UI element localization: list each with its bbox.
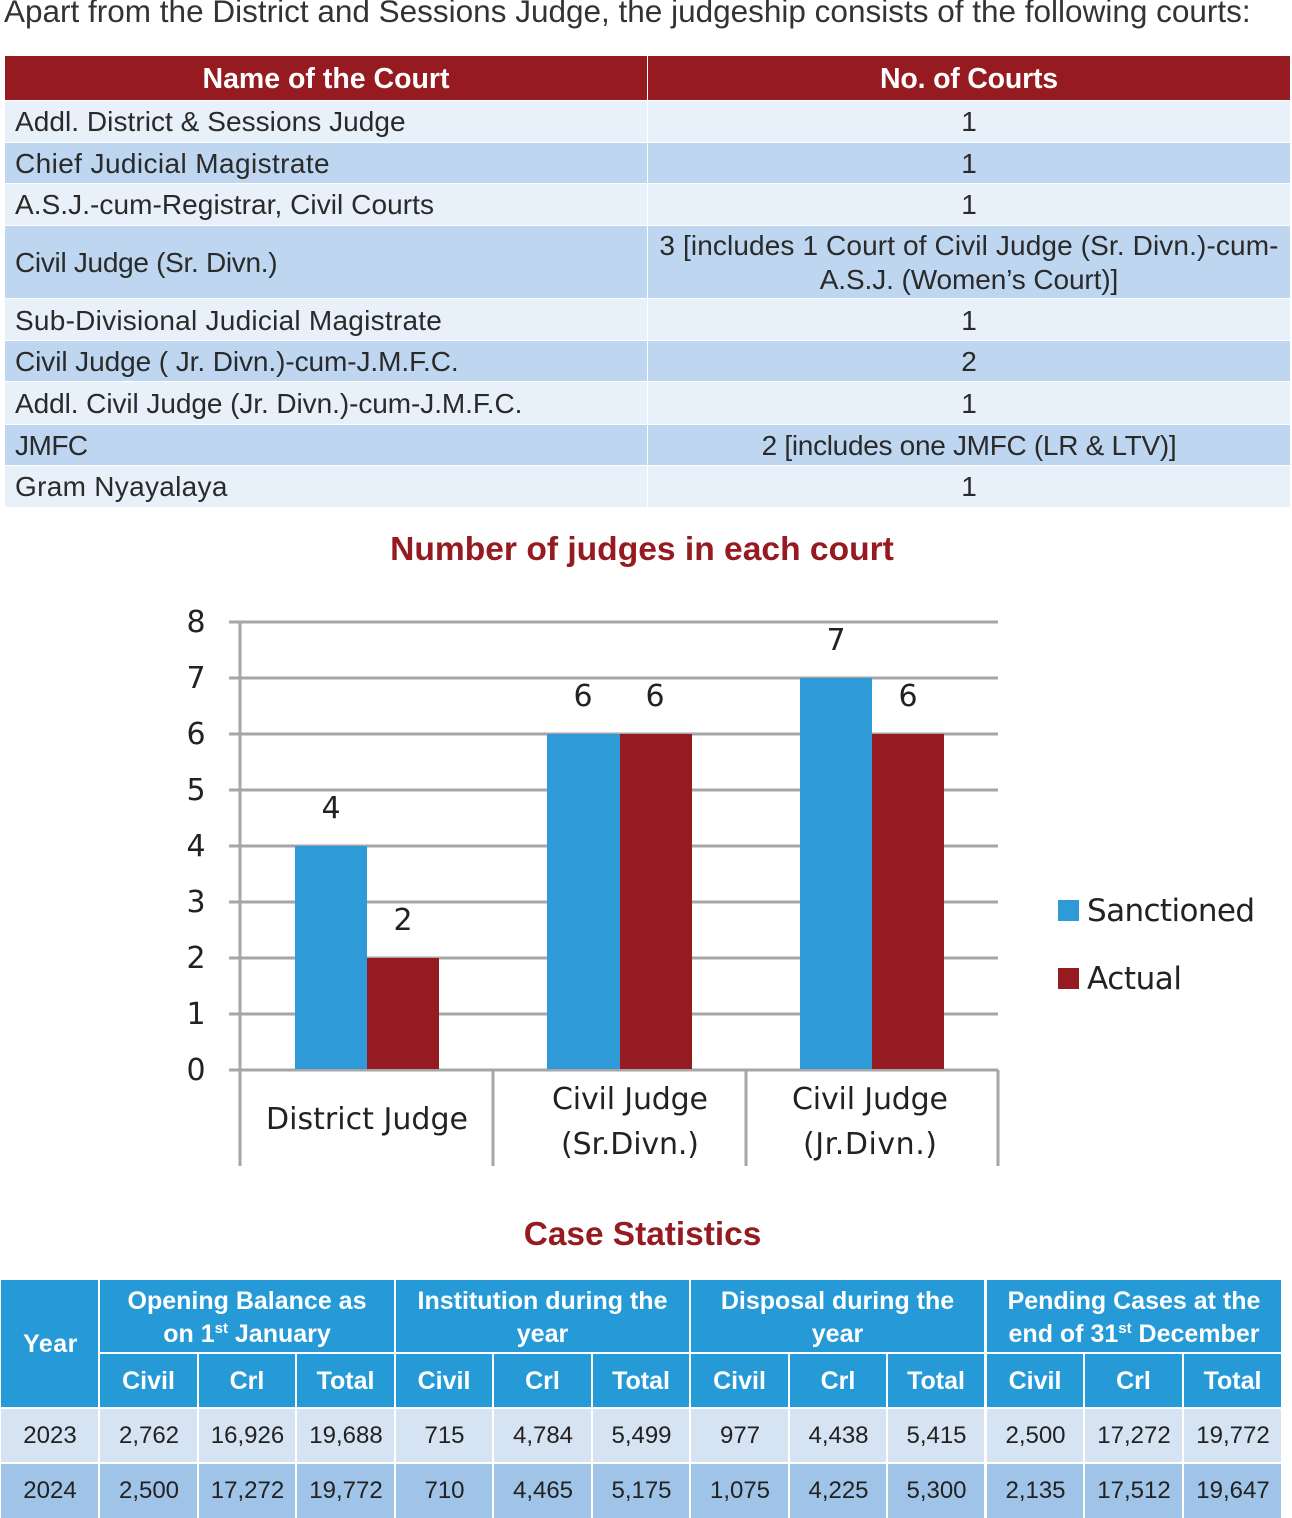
- case statistics table: 4,784: [513, 1422, 573, 1449]
- axis and data labels: District Judge: [266, 1102, 468, 1137]
- case statistics table: 2,762: [119, 1422, 179, 1449]
- case statistics table: 1,075: [710, 1476, 770, 1504]
- case statistics table: 19,647: [1196, 1476, 1270, 1504]
- axis and data labels: 4: [321, 791, 341, 826]
- case statistics table: 4,465: [513, 1476, 573, 1504]
- case statistics table: 2,135: [1005, 1476, 1066, 1504]
- legend: [1058, 893, 1255, 997]
- case statistics table: 19,688: [309, 1422, 383, 1449]
- courts table: 3 [includes 1 Court of Civil Judge (Sr. Divn.)-cum-: [659, 230, 1279, 261]
- case statistics table: Civil: [122, 1366, 175, 1394]
- courts table: Chief Judicial Magistrate: [15, 148, 330, 179]
- axis and data labels: 6: [573, 679, 593, 714]
- case statistics table: 5,300: [906, 1476, 967, 1504]
- axis and data labels: 2: [186, 941, 206, 976]
- courts table: [5, 56, 1290, 507]
- case statistics table: 19,772: [309, 1476, 383, 1504]
- case statistics table: Civil: [418, 1366, 470, 1394]
- courts table: 1: [961, 304, 977, 336]
- case statistics table: Total: [1204, 1366, 1261, 1394]
- year header: Year: [23, 1330, 78, 1358]
- axis and data labels: 2: [393, 903, 413, 938]
- courts table: Sub-Divisional Judicial Magistrate: [15, 304, 442, 336]
- courts table: 1: [961, 106, 977, 136]
- case statistics table: 16,926: [211, 1422, 284, 1449]
- case statistics table: 2,500: [119, 1476, 179, 1504]
- axis and data labels: 1: [186, 997, 206, 1032]
- disposal header: Disposal during the: [721, 1286, 954, 1314]
- legend: Actual: [1087, 961, 1182, 997]
- axis and data labels: (Jr.Divn.): [803, 1127, 937, 1162]
- case statistics table: 5,415: [906, 1422, 967, 1449]
- case statistics table: Total: [612, 1366, 670, 1394]
- courts table: Civil Judge (Sr. Divn.): [15, 247, 277, 278]
- case statistics table: 5,499: [611, 1422, 672, 1449]
- courts table: A.S.J. (Women’s Court)]: [820, 264, 1118, 295]
- header: name of the court: [5, 56, 647, 100]
- axis and data labels: 4: [186, 829, 206, 864]
- pending header: Pending Cases at the: [1008, 1286, 1260, 1314]
- institution header: [396, 1280, 689, 1352]
- header: name of the court: Name of the Court: [202, 62, 450, 94]
- opening balance header: on 1st January: [163, 1320, 331, 1348]
- axis and data labels: 8: [186, 605, 206, 640]
- axis and data labels: 3: [186, 885, 206, 920]
- header: number of courts: [648, 56, 1290, 100]
- case statistics table: 977: [720, 1422, 760, 1449]
- case statistics table: Total: [907, 1366, 965, 1394]
- case statistics table: 4,438: [808, 1422, 869, 1449]
- chart title: Number of judges in each court: [390, 531, 894, 568]
- pending header: [987, 1280, 1281, 1352]
- case statistics table: Civil: [713, 1366, 766, 1394]
- axis and data labels: 6: [186, 717, 206, 752]
- case statistics table: 17,272: [211, 1476, 284, 1504]
- case statistics table: Crl: [525, 1366, 560, 1394]
- bars: district judge: [295, 846, 439, 1069]
- case statistics table: 715: [424, 1422, 465, 1449]
- courts table: 2 [includes one JMFC (LR & LTV)]: [762, 430, 1176, 461]
- courts table: Addl. District & Sessions Judge: [15, 106, 406, 136]
- axis and data labels: 5: [186, 773, 206, 808]
- case statistics table: Civil: [1009, 1366, 1061, 1394]
- axis and data labels: Civil Judge: [792, 1082, 948, 1117]
- case statistics table: 17,512: [1097, 1476, 1171, 1504]
- case statistics table: 5,175: [611, 1476, 672, 1504]
- axis and data labels: 7: [826, 623, 846, 658]
- axis and data labels: 6: [898, 679, 918, 714]
- opening balance header: [100, 1280, 394, 1352]
- courts table: JMFC: [15, 430, 88, 461]
- axis and data labels: 6: [645, 679, 665, 714]
- courts table: 2: [961, 346, 977, 377]
- opening balance header: Opening Balance as: [128, 1286, 366, 1314]
- courts table: 1: [961, 470, 977, 502]
- bars: civil judge junior: [800, 678, 944, 1069]
- case statistics table: 2,500: [1005, 1422, 1066, 1449]
- courts table: A.S.J.-cum-Registrar, Civil Courts: [15, 188, 434, 220]
- header: number of courts: No. of Courts: [880, 62, 1058, 94]
- legend: Sanctioned: [1087, 893, 1255, 929]
- axis and data labels: 0: [186, 1053, 206, 1088]
- pending header: end of 31st December: [1009, 1320, 1259, 1348]
- case statistics table: 2023: [23, 1422, 77, 1449]
- courts table: 1: [961, 188, 977, 220]
- axis and data labels: (Sr.Divn.): [561, 1127, 699, 1162]
- case statistics table: Total: [317, 1366, 374, 1394]
- case statistics table: [1, 1280, 1281, 1518]
- case statistics title: Case Statistics: [524, 1216, 761, 1253]
- institution header: Institution during the: [418, 1286, 667, 1314]
- year header: [1, 1280, 98, 1407]
- case statistics table: 710: [424, 1476, 465, 1504]
- institution header: year: [517, 1320, 568, 1348]
- courts table: Civil Judge ( Jr. Divn.)-cum-J.M.F.C.: [15, 346, 459, 377]
- disposal header: year: [812, 1320, 863, 1348]
- case statistics table: 4,225: [808, 1476, 869, 1504]
- bars: civil judge senior: [547, 734, 692, 1069]
- case statistics table: 19,772: [1196, 1422, 1270, 1449]
- disposal header: [691, 1280, 984, 1352]
- axis and data labels: [186, 605, 948, 1162]
- courts table: Addl. Civil Judge (Jr. Divn.)-cum-J.M.F.C.: [15, 388, 522, 419]
- case statistics table: 2024: [23, 1476, 77, 1504]
- axis and data labels: Civil Judge: [552, 1082, 708, 1117]
- case statistics table: Crl: [821, 1366, 855, 1394]
- courts table: 1: [961, 388, 977, 419]
- case statistics table: Crl: [230, 1366, 264, 1394]
- case statistics table: 17,272: [1097, 1422, 1171, 1449]
- courts table: Gram Nyayalaya: [15, 470, 228, 502]
- bar chart: [186, 605, 1255, 1166]
- axis and data labels: 7: [186, 661, 206, 696]
- case statistics table: Crl: [1116, 1366, 1151, 1394]
- courts table: 1: [961, 148, 977, 179]
